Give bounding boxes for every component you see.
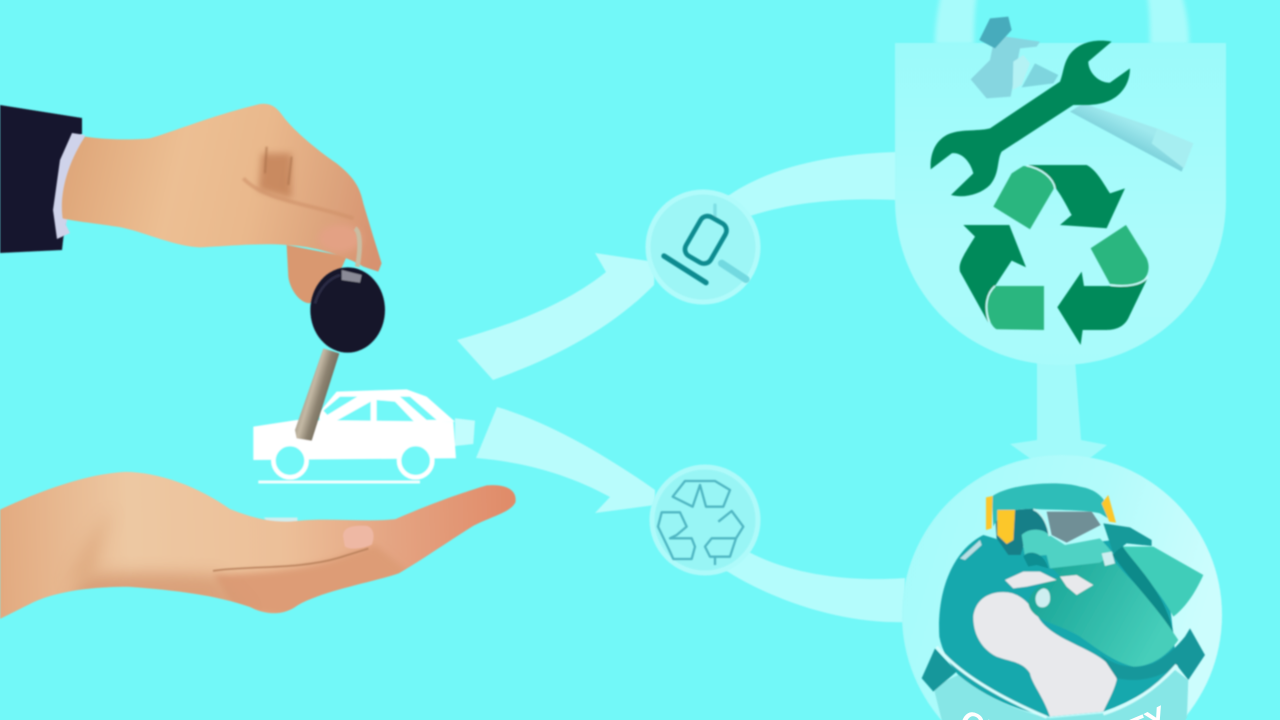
wrist shadow	[72, 566, 232, 601]
fob button	[342, 270, 362, 283]
ribbon tails and dark band	[922, 628, 1205, 692]
icon: hammer	[971, 17, 1193, 172]
thumb tip	[318, 224, 362, 252]
arrow: car to recycling circle	[476, 407, 655, 513]
connector: recycling circle to globe	[725, 550, 905, 622]
ground line	[258, 477, 420, 486]
car roof	[992, 483, 1113, 527]
rear wheel	[273, 444, 307, 477]
yellow lights	[986, 495, 1116, 544]
pale fleck	[960, 540, 982, 560]
icon: white car	[253, 389, 475, 482]
car windows	[323, 397, 437, 423]
fob highlight	[315, 275, 340, 303]
connector: repair circle to shield	[725, 152, 900, 216]
circle: repair icon	[648, 192, 758, 302]
thumb crease	[213, 549, 368, 571]
europe islands	[1005, 572, 1093, 595]
thumbnail	[343, 526, 373, 549]
eastern fin	[1120, 547, 1203, 617]
wheel arch	[1023, 553, 1048, 568]
eurasia	[1028, 560, 1178, 667]
globe backdrop circle	[902, 455, 1222, 720]
icon: car key	[295, 228, 385, 441]
wrist dimple	[74, 527, 104, 576]
dark seam	[1113, 545, 1173, 633]
upper hand holding key	[62, 104, 382, 303]
globe illustration	[922, 483, 1205, 720]
palm and arm	[0, 472, 516, 619]
palm highlight	[264, 517, 297, 524]
lake and highlights	[1036, 552, 1115, 607]
key blade	[295, 348, 339, 441]
ribbon	[933, 670, 1188, 720]
arrow: shield down to globe	[1010, 360, 1107, 462]
shield body	[895, 43, 1226, 365]
index underside shadow	[243, 178, 353, 218]
car body	[1022, 530, 1113, 568]
lower finger	[287, 245, 347, 303]
car rear bumper	[455, 418, 475, 446]
panel: globe with car	[902, 456, 1223, 720]
key ring	[355, 228, 360, 267]
arrow: car to repair circle	[457, 253, 655, 380]
icon: green recycling symbol	[960, 165, 1149, 345]
icon: outlined recycling symbol	[658, 481, 743, 565]
car window	[1047, 512, 1101, 543]
panel: repair and recycling shield	[895, 0, 1226, 365]
icon: hammer outline	[664, 205, 746, 283]
shield shackle	[935, 0, 1189, 45]
suit sleeve	[0, 105, 82, 253]
key fob	[310, 267, 385, 353]
sphere	[939, 535, 1177, 717]
palm underside	[215, 546, 404, 614]
car pillar highlight	[1033, 509, 1049, 536]
shirt cuff	[53, 133, 85, 239]
dark shoulder	[1103, 523, 1152, 553]
ribbon edge	[937, 647, 1177, 717]
car cabin	[318, 389, 455, 422]
front wheel	[399, 444, 432, 477]
hand shading	[68, 511, 412, 619]
icon: wrench	[931, 41, 1130, 196]
palm hollow shadow	[258, 153, 292, 198]
circle background	[648, 192, 758, 302]
hand shape	[62, 104, 382, 272]
circle: recycling icon	[652, 467, 758, 573]
car dark underside	[995, 508, 1049, 555]
car body	[253, 420, 456, 460]
lower open hand	[0, 472, 516, 619]
africa land	[973, 592, 1117, 717]
finger creases	[265, 147, 292, 185]
circle background	[652, 467, 758, 573]
